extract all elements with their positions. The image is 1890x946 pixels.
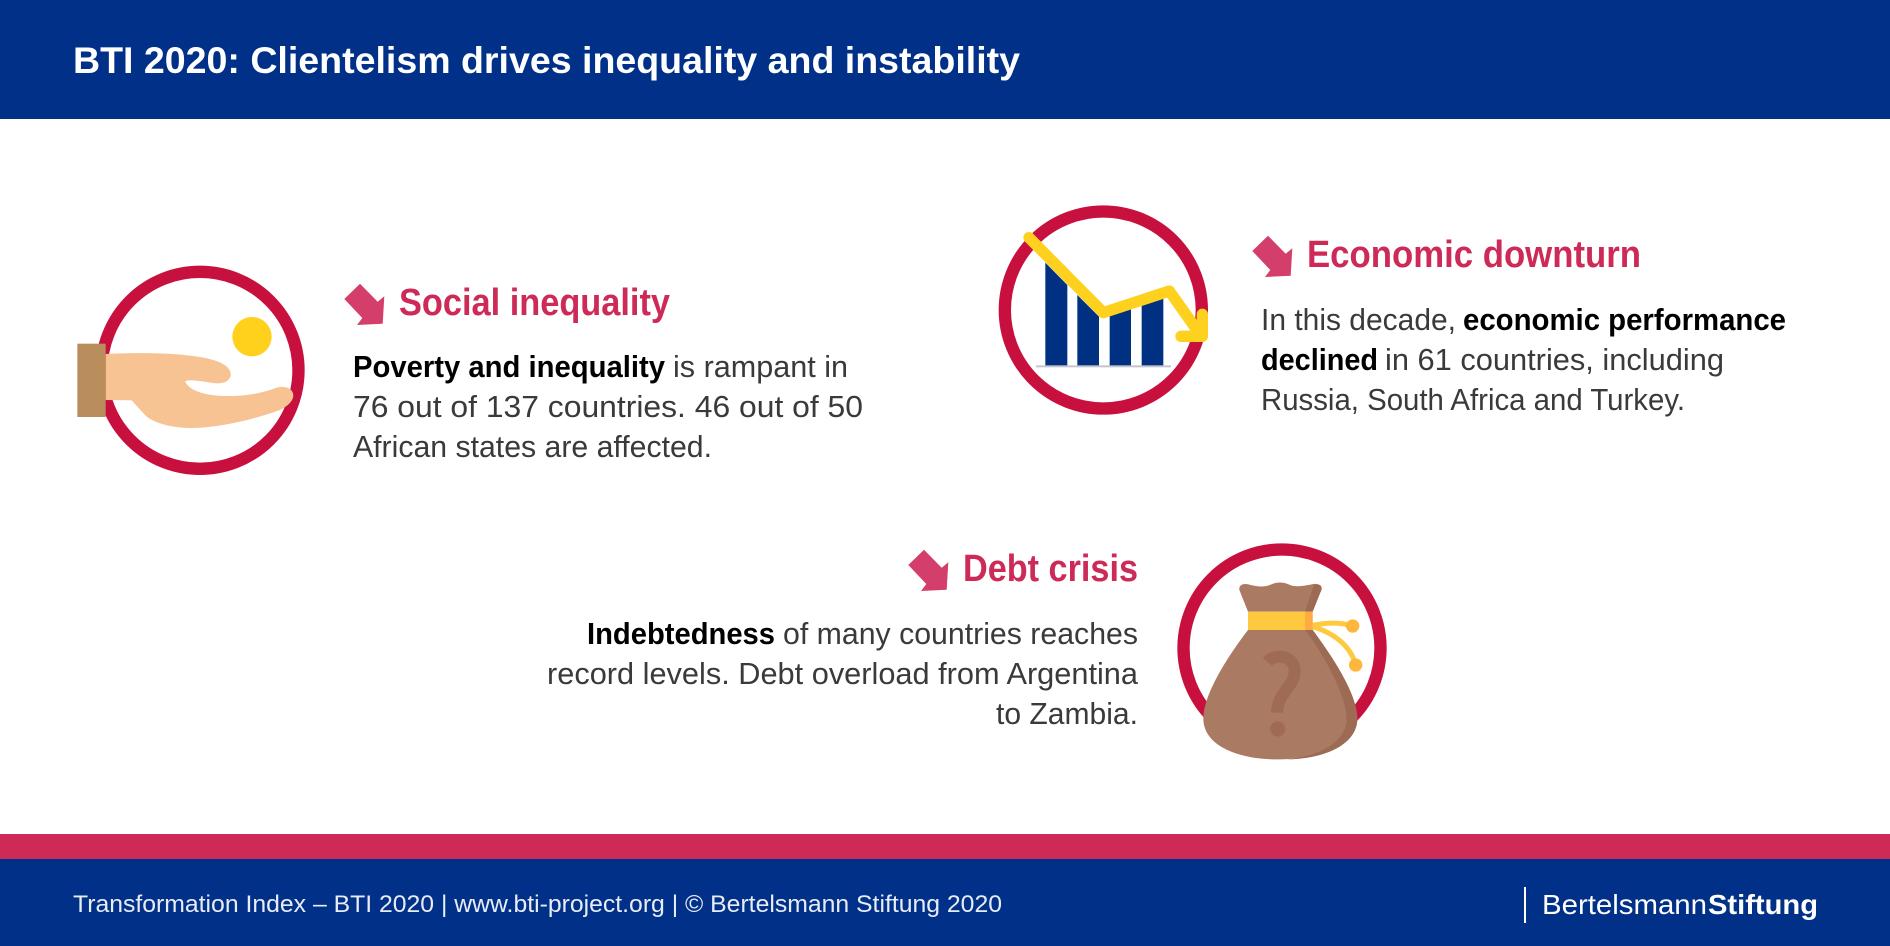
body text: social inequality: African states are affected. (353, 429, 712, 464)
title: BTI 2020: Clientelism drives inequality and instability (73, 40, 1020, 81)
logo: Bertelsmann Stiftung (1524, 887, 1818, 923)
heading: debt crisis: Debt crisis (963, 548, 1138, 590)
arrow: down (344, 284, 384, 325)
body text: social inequality: is rampant in (673, 349, 848, 384)
body text: social inequality: 76 out of 137 countries. 46 out of 50 (353, 389, 863, 424)
panel: economic downturn (1005, 211, 1786, 417)
body text: debt crisis: to Zambia. (996, 696, 1138, 731)
body text: economic downturn: declined (1261, 342, 1378, 377)
panel: debt crisis (547, 548, 1380, 759)
logo: Bertelsmann Stiftung: Stiftung (1708, 889, 1818, 920)
arrow: down (1252, 236, 1292, 277)
icon: hand with coin (77, 272, 298, 469)
body text: debt crisis: of many countries reaches (783, 616, 1138, 651)
footer band (0, 859, 1890, 946)
icon: falling bar chart (1005, 211, 1202, 408)
icon: money bag with question mark (1183, 549, 1380, 759)
footer source line: Transformation Index – BTI 2020 | www.bti-project.org | © Bertelsmann Stiftung 2020 (73, 891, 1002, 918)
header band (0, 0, 1890, 119)
body text: social inequality: Poverty and inequality (353, 349, 666, 384)
panel: social inequality (77, 272, 863, 469)
body text: debt crisis: Indebtedness (587, 616, 775, 651)
body text: economic downturn: Russia, South Africa and Turkey. (1261, 382, 1685, 417)
red footer band (0, 834, 1890, 859)
body text: economic downturn: In this decade, (1261, 302, 1456, 337)
heading: economic downturn: Economic downturn (1307, 234, 1641, 276)
body text: debt crisis: record levels. Debt overload from Argentina (547, 656, 1139, 691)
body text: economic downturn: economic performance (1463, 302, 1786, 337)
arrow: down (908, 550, 948, 591)
logo: Bertelsmann Stiftung: Bertelsmann (1542, 889, 1707, 920)
body text: economic downturn: in 61 countries, including (1385, 342, 1724, 377)
body text: economic downturn (1261, 302, 1786, 417)
heading: social inequality: Social inequality (399, 282, 670, 324)
body text: debt crisis (547, 616, 1139, 731)
body text: social inequality (353, 349, 863, 464)
